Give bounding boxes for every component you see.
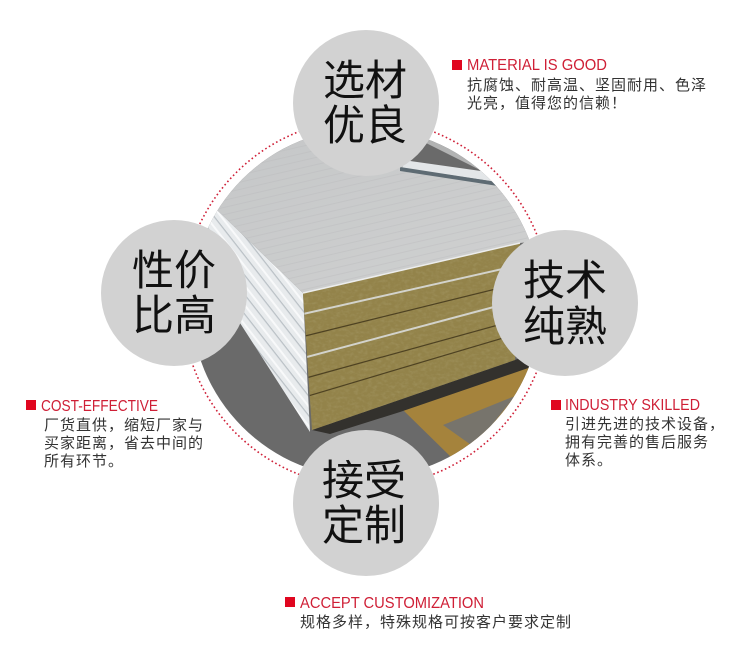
text block: material is good: 光亮，值得您的信赖！ bbox=[467, 95, 627, 112]
circle: 选材优良: 选材 bbox=[323, 57, 407, 104]
text block: material is good bbox=[452, 57, 707, 112]
circle: 接受定制: 定制 bbox=[322, 502, 406, 549]
spare panel strip bbox=[403, 161, 492, 181]
spare panel shadow bbox=[400, 167, 498, 186]
floor bbox=[201, 140, 529, 466]
shadow under the stack bbox=[312, 358, 529, 434]
circle: 性价比高: 比高 bbox=[132, 292, 216, 339]
circle: 技术纯熟: 技术 bbox=[523, 257, 607, 304]
text block: industry skilled: 引进先进的技术设备， bbox=[565, 416, 725, 433]
text block: cost-effective: 厂货直供，缩短厂家与 bbox=[44, 417, 204, 434]
text block: cost-effective: COST-EFFECTIVE bbox=[41, 398, 158, 415]
text block: industry skilled: 体系。 bbox=[565, 452, 613, 469]
grey plate on floor bbox=[443, 396, 515, 447]
rusty floor plate bbox=[403, 366, 530, 458]
circle: 接受定制: 接受 bbox=[322, 457, 406, 504]
text block: accept customization bbox=[285, 595, 572, 631]
top edge highlight bbox=[303, 243, 520, 293]
circle: 技术纯熟: 纯熟 bbox=[523, 303, 607, 350]
photo: stacked rock wool sandwich panels bbox=[201, 140, 529, 466]
top face ribs bbox=[185, 120, 545, 293]
background wall bbox=[426, 140, 478, 170]
text block: industry skilled: 拥有完善的售后服务 bbox=[565, 434, 709, 451]
circle: 性价比高 bbox=[101, 220, 247, 366]
circle: 性价比高: 性价 bbox=[132, 247, 216, 294]
text block: cost-effective: 买家距离，省去中间的 bbox=[44, 435, 204, 452]
text block: industry skilled bbox=[551, 397, 725, 469]
dotted red ring bbox=[182, 119, 550, 487]
text block: industry skilled: INDUSTRY SKILLED bbox=[565, 397, 700, 414]
text block: material is good: MATERIAL IS GOOD bbox=[467, 57, 607, 74]
panel top face bbox=[218, 140, 529, 293]
metal seams bbox=[304, 268, 501, 358]
dark seams bbox=[306, 289, 502, 396]
text block: material is good: 抗腐蚀、耐高温、坚固耐用、色泽 bbox=[467, 76, 707, 94]
circle: 接受定制 bbox=[293, 430, 439, 576]
circle: 选材优良 bbox=[293, 30, 439, 176]
text block: accept customization: ACCEPT CUSTOMIZATION bbox=[300, 595, 484, 612]
circle: 技术纯熟 bbox=[492, 230, 638, 376]
rock wool end face bbox=[303, 244, 520, 430]
panel side edges bbox=[208, 210, 310, 432]
text block: cost-effective: 所有环节。 bbox=[44, 453, 124, 470]
text block: cost-effective bbox=[26, 398, 204, 470]
circle: 选材优良: 优良 bbox=[323, 102, 407, 149]
text block: accept customization: 规格多样，特殊规格可按客户要求定制 bbox=[300, 614, 572, 631]
